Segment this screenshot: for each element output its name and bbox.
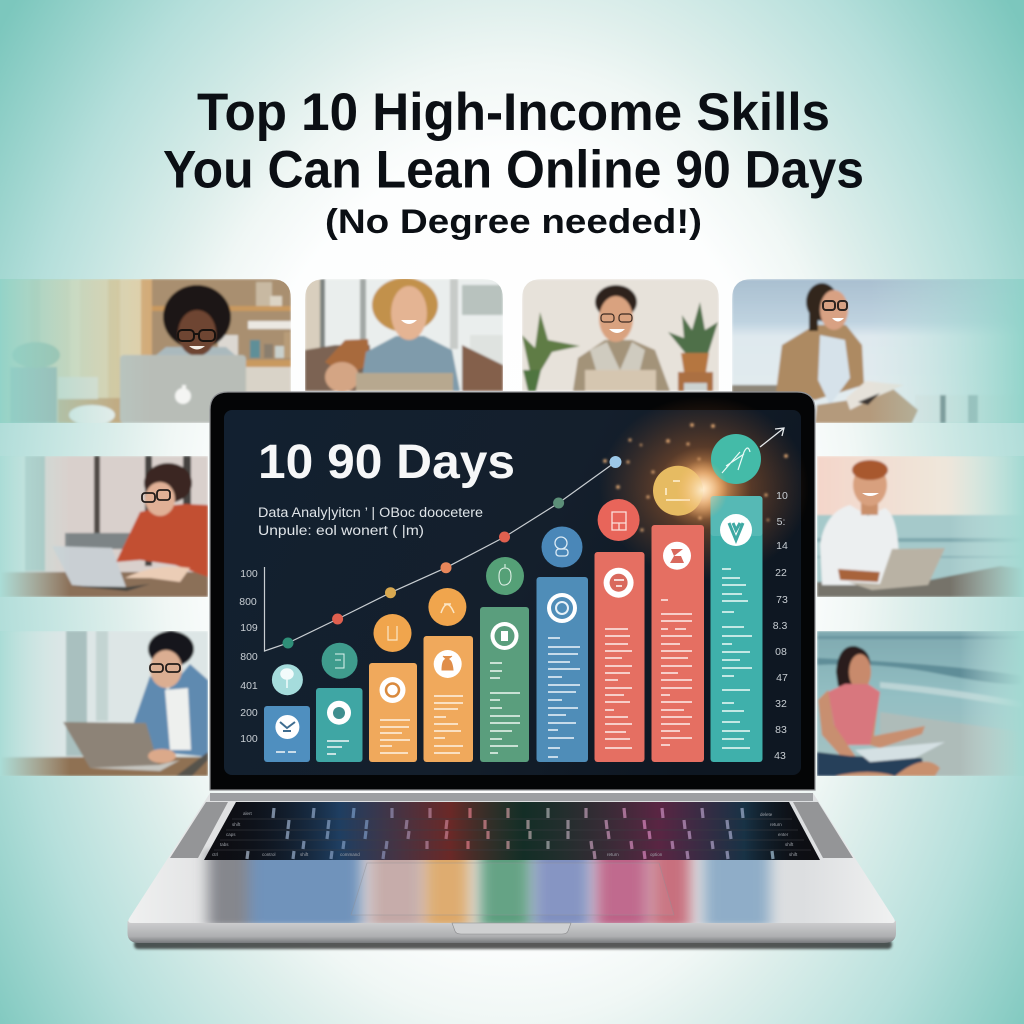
title: You Can Lean Online 90 Days: [163, 140, 864, 200]
title: (No Degree needed!): [325, 203, 702, 241]
front notch: [452, 923, 571, 934]
bar 4: [424, 588, 473, 762]
laptop lid: [210, 392, 815, 790]
right axis labels: 22: [775, 567, 787, 579]
key labels: caps: [226, 832, 236, 837]
bar 3: [369, 614, 417, 762]
keyboard: [204, 802, 820, 860]
left axis labels: 200: [240, 707, 258, 719]
right axis labels: 08: [775, 646, 787, 658]
right axis labels: 10: [776, 490, 788, 502]
key labels: ctrl: [212, 852, 218, 857]
right axis labels: 47: [776, 672, 788, 684]
photo: blonde woman on sofa: [305, 278, 503, 392]
photo: woman in blazer reading: [732, 279, 1024, 423]
screen heading: 10 90 Days: [258, 436, 515, 489]
bar 2: [316, 643, 362, 762]
key labels: shift: [789, 852, 798, 857]
left axis labels: 100: [240, 733, 258, 745]
sparkles: [603, 423, 788, 532]
photo: smiling woman with plants: [522, 279, 719, 391]
right axis labels: 8.3: [773, 620, 787, 632]
screen subheading: [258, 505, 483, 538]
left axis labels: 800: [240, 651, 258, 663]
key labels: [212, 811, 798, 857]
key labels: enter: [778, 832, 789, 837]
laptop screen: [224, 396, 809, 775]
photo: man in white shirt by the sea: [817, 456, 1024, 597]
key labels: alert: [243, 811, 253, 816]
laptop: [128, 392, 896, 949]
bar 9: [710, 434, 762, 762]
photo: woman with afro at laptop: [0, 279, 291, 425]
left axis labels: 109: [240, 622, 258, 634]
bar 7: [594, 499, 644, 762]
left axis labels: 100: [240, 568, 258, 580]
right axis labels: 43: [774, 750, 786, 762]
key labels: delete: [760, 812, 773, 817]
trackpad reflections: [208, 850, 770, 925]
key labels: command: [340, 852, 360, 857]
bar 5: [480, 557, 529, 762]
growth line chart: [264, 456, 622, 651]
key labels: return: [770, 822, 782, 827]
bright flare over gold circle: [676, 460, 728, 520]
key labels: tabs: [220, 842, 229, 847]
right axis labels: 83: [775, 724, 787, 736]
right axis labels: 73: [776, 594, 788, 606]
left axis labels: 800: [239, 596, 257, 608]
left axis labels: 401: [240, 680, 258, 692]
key labels: shift: [785, 842, 794, 847]
key labels: return: [607, 852, 619, 857]
trackpad: [351, 863, 674, 915]
right axis labels: 32: [775, 698, 787, 710]
photo: woman in red sweater: [0, 456, 208, 597]
key labels: option: [650, 852, 663, 857]
right axis labels: 5:: [777, 516, 785, 528]
screen subheading: Unpule: eol wonert ( |m): [258, 523, 424, 538]
glow behind gold circle: [599, 396, 809, 580]
laptop base and keyboard deck: [128, 793, 896, 949]
key labels: shift: [300, 852, 309, 857]
title: [163, 83, 864, 241]
screen subheading: Data Analy|yitcn ’ | OBoc doocetere: [258, 505, 483, 520]
speaker grille left: [170, 802, 228, 858]
arrow: [760, 428, 784, 447]
title: Top 10 High-Income Skills: [197, 83, 830, 142]
key labels: control: [262, 852, 276, 857]
right axis labels: 14: [776, 540, 788, 552]
bar 6: [536, 526, 588, 762]
left axis labels: [239, 568, 258, 745]
bar 8: [652, 466, 704, 762]
photo: woman on beach: [817, 631, 1024, 776]
key labels: shift: [232, 822, 241, 827]
photo: man in denim shirt typing: [0, 631, 208, 776]
speaker grille right: [793, 802, 853, 858]
bar 1: [264, 664, 310, 762]
right axis labels: [773, 490, 788, 762]
